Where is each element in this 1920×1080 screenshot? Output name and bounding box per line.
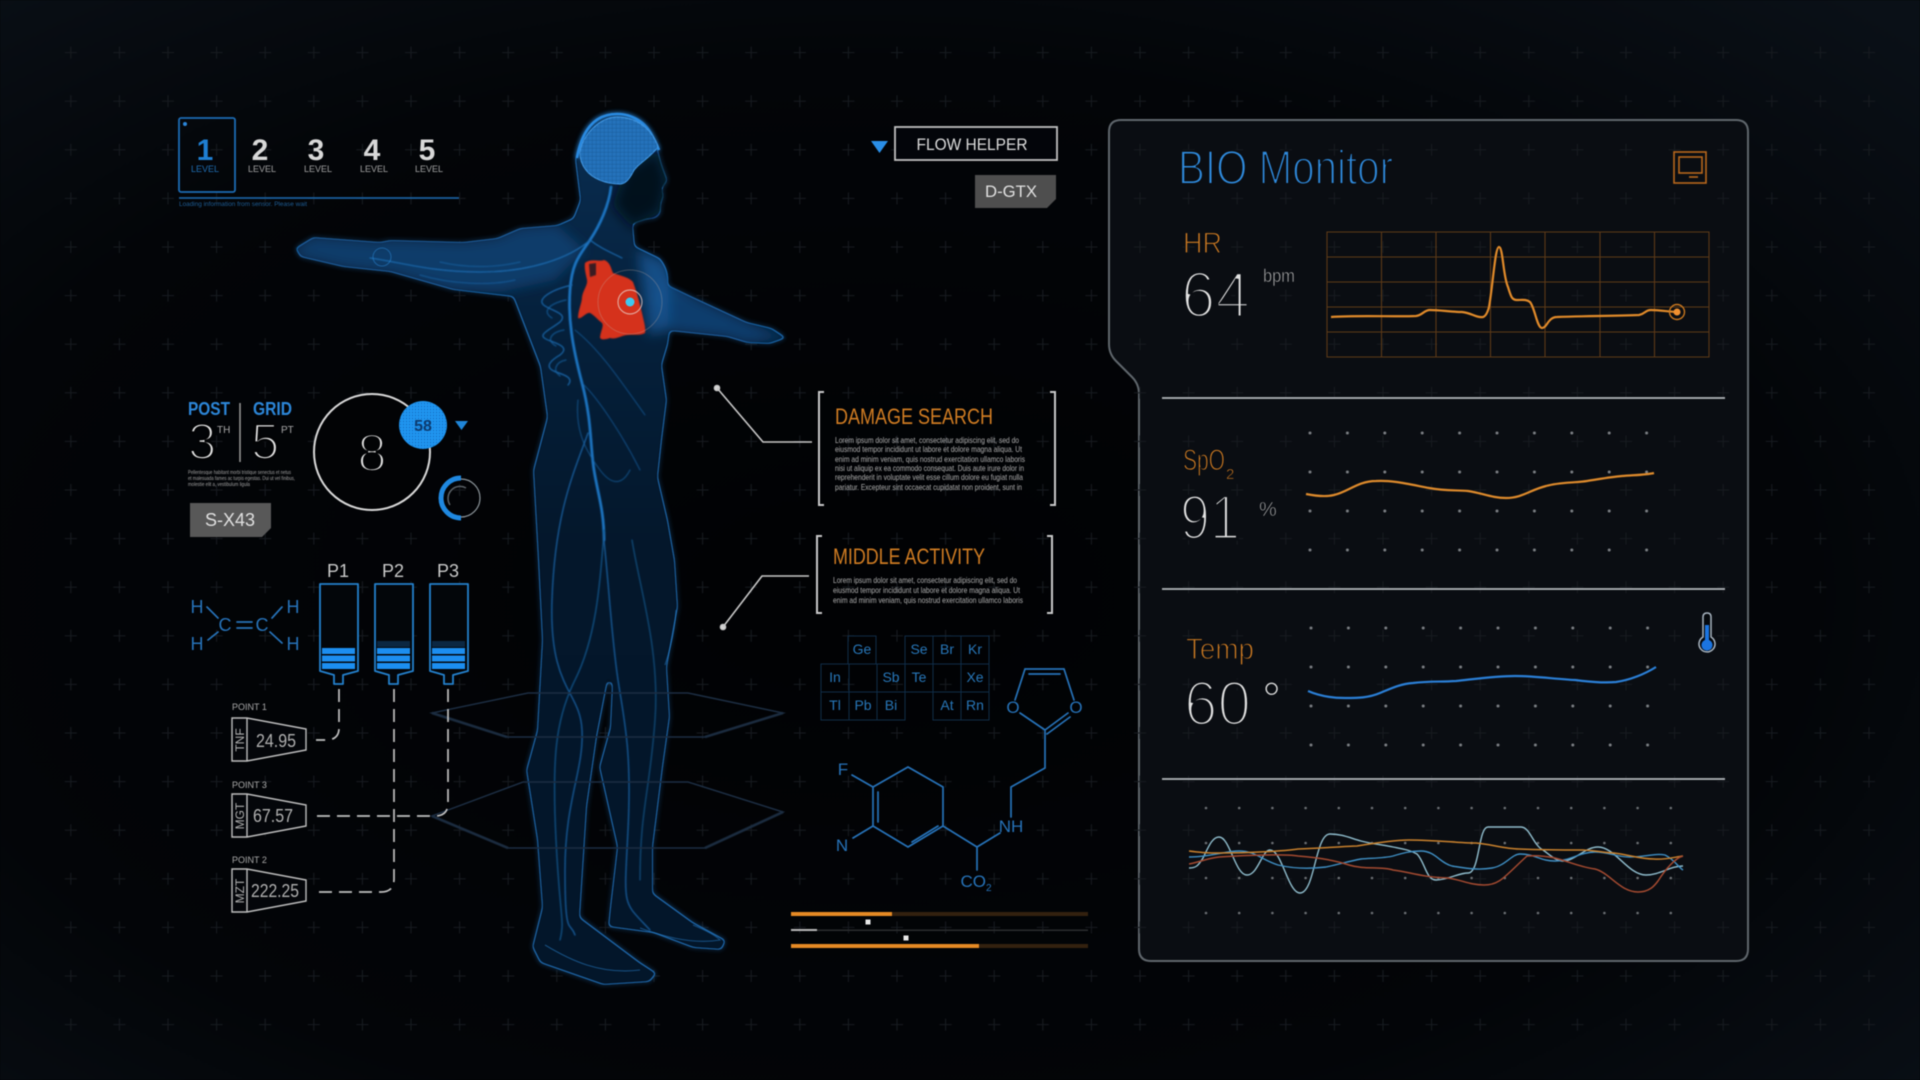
middle body: eiusmod tempor incididunt ut labore et dolore magna aliqua. Ut [833,585,1021,595]
dashed connectors [310,689,448,892]
ethylene molecule: H [190,634,204,654]
level selector [179,118,459,208]
middle body: Lorem ipsum dolor sit amet, consectetur adipiscing elit, sed do [833,575,1017,585]
S-X43 tag: S-X43 [205,510,255,530]
heart [578,260,662,339]
value badge [399,401,447,449]
post value: 3 [188,413,216,470]
temperature readout: 60 [1184,669,1251,739]
ethylene molecule: H [190,597,204,617]
body silhouette [295,113,787,985]
blue signal [1189,851,1683,870]
damage body [835,435,1025,492]
temperature chart [1292,608,1666,764]
grid value: 5 [251,413,279,470]
damage body: nisi ut aliquip ex ea commodo consequat. Duis aute irure dolor in [835,463,1024,473]
level selector: 1 [197,134,213,167]
organic molecule diagram: CO [960,872,986,891]
periodic table: Se [910,641,928,657]
red signal [1189,855,1683,892]
S-X43 tag [190,503,271,537]
panel title: BIO Monitor [1178,142,1393,195]
middle body [833,575,1023,605]
point 2 readout [232,855,306,912]
periodic table [821,636,989,720]
panel: BIO Monitor frame [1109,120,1748,961]
dial gauge: 8 [357,424,387,483]
D-GTX tag: D-GTX [985,182,1037,201]
middle body: enim ad minim veniam, quis nostrud exercitation ullamco laboris [833,595,1023,605]
human body figure [295,113,787,985]
organic molecule diagram: O [1069,698,1083,717]
SpO2 readout: SpO [1183,444,1225,477]
post and grid stats: TH [217,425,230,436]
loading note: Loading information from sensor. Please wait [179,202,307,208]
HR readout: bpm [1263,266,1295,286]
ethylene molecule: H [286,634,300,654]
callout: middle activity [720,536,1052,630]
organic molecule diagram: F [838,760,848,779]
point 1 readout [232,702,306,761]
temperature readout [1184,633,1281,739]
SpO2 readout: % [1259,499,1277,521]
temperature readout: Temp [1186,633,1254,666]
organic molecule diagram: O [1006,698,1020,717]
fine print: molestie elit a, vestibulum ligula [188,482,250,488]
heart dark notch [589,263,596,277]
SpO2 readout: 91 [1180,483,1240,553]
fine print: Pellentesque habitant morbi tristique senectus et netus [188,470,291,476]
nerves and veins [370,187,656,940]
point 3 readout [232,780,306,837]
damage body: Lorem ipsum dolor sit amet, consectetur adipiscing elit, sed do [835,435,1019,445]
point 2 readout: MZT [233,878,247,903]
ethylene molecule: C [218,615,232,635]
SpO2 readout [1180,444,1277,553]
level selector: LEVEL [304,164,332,174]
knee and foot highlights [373,248,720,971]
point 1 readout: POINT 1 [232,702,267,712]
level 1 active box [179,118,235,192]
tube P3 [430,561,468,684]
periodic table: Te [912,669,927,685]
damage heading: DAMAGE SEARCH [835,404,993,429]
level 5: 5 [419,134,435,167]
cyan signal [1189,827,1683,893]
periodic table: Br [940,641,954,657]
level selector: LEVEL [248,164,276,174]
level selector: LEVEL [360,164,388,174]
middle heading: MIDDLE ACTIVITY [833,544,985,569]
flow helper control: FLOW HELPER [916,135,1028,154]
point 1 readout: TNF [233,728,247,752]
periodic table: Xe [966,669,984,685]
D-GTX tag [975,175,1056,208]
point 2 readout: 222.25 [251,881,299,901]
ethylene molecule: C [256,615,268,635]
point 3 readout: MGT [233,802,247,829]
body shading [295,150,787,343]
organic molecule diagram [836,669,1083,894]
tube P2 [375,561,413,684]
periodic table: Rn [966,697,984,713]
tube P2: P2 [382,561,404,581]
damage body: enim ad minim veniam, quis nostrud exercitation ullamco laboris [835,454,1025,464]
periodic table: Pb [854,697,872,713]
dial gauge: 58 [414,418,432,435]
organic molecule diagram: 2 [986,883,992,894]
fine print: et malesuada fames ac turpis egestas. Dui ut vel finibus, [188,476,295,482]
level selector: LEVEL [191,164,219,174]
periodic table: Bi [885,697,897,713]
ethylene molecule [190,597,300,654]
progress bars [791,912,1088,948]
combined signals chart [1189,790,1687,930]
icon: thermometer [1699,613,1715,652]
post and grid stats [188,399,295,488]
leader line [720,576,809,630]
callout: damage search [714,386,1055,505]
damage body: reprehenderit in voluptate velit esse cillum dolore eu fugiat nulla [835,472,1023,482]
level 3: 3 [308,134,324,167]
HR readout: HR [1183,227,1222,260]
point 3 readout: 67.57 [253,806,293,826]
ECG end marker [1670,304,1684,320]
HR ECG chart [1327,232,1709,357]
level 4: 4 [364,134,381,167]
periodic table: At [940,697,954,713]
post and grid stats: PT [281,425,294,436]
periodic table: Ge [853,641,872,657]
periodic table: Kr [968,641,982,657]
heart target [598,270,662,334]
GRID heading: GRID [253,399,292,419]
POST heading: POST [188,399,230,419]
icon: monitor [1674,152,1706,183]
HR readout [1181,227,1295,331]
SpO2 readout: 2 [1226,466,1234,483]
dial gauge [314,394,468,510]
point 3 readout: POINT 3 [232,780,267,790]
spinner icon [441,478,480,518]
tube P1: P1 [327,561,349,581]
HR readout: 64 [1181,258,1250,331]
brain [577,114,659,184]
ethylene molecule: H [286,597,300,617]
level 2: 2 [252,134,268,167]
tube P3: P3 [437,561,459,581]
point 2 readout: POINT 2 [232,855,267,865]
orange signal [1189,840,1683,859]
organic molecule diagram: NH [999,817,1023,836]
damage body: eiusmod tempor incididunt ut labore et dolore magna aliqua. Ut [835,444,1023,454]
SpO2 chart [1291,414,1665,570]
level selector: LEVEL [415,164,443,174]
point 1 readout: 24.95 [256,731,296,751]
fine print [188,470,295,488]
periodic table: Sb [882,669,900,685]
organic molecule diagram: N [836,836,848,855]
tube P1 [320,561,358,684]
temperature readout: ° [1262,674,1281,727]
leader line [714,386,812,442]
hexagon floor planes [432,693,783,848]
damage body: pariatur. Excepteur sint occaecat cupidatat non proident, sunt in [835,482,1022,492]
flow helper control [871,127,1057,160]
badge arrow [455,421,468,430]
periodic table: Tl [829,697,841,713]
periodic table: In [829,669,841,685]
